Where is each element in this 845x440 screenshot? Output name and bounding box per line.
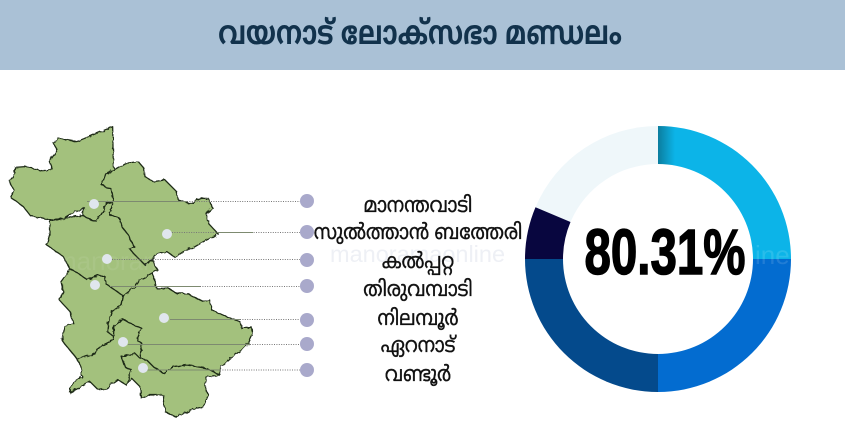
region: Mananthavady: [9, 127, 115, 222]
watermark: manoramaonline: [330, 241, 505, 267]
map: seven assembly constituencies: [9, 127, 252, 417]
constituency labels: [314, 193, 522, 386]
constituency labels: കൽപ്പറ്റ: [382, 250, 454, 275]
segment: bottom left: [525, 259, 658, 392]
region: Sulthan Bathery: [102, 162, 218, 265]
constituency labels: സുൽത്താൻ ബത്തേരി: [314, 220, 522, 244]
constituency labels: വണ്ടൂർ: [385, 363, 451, 386]
segment: navy: [525, 207, 570, 259]
watermark on ring: ine: [755, 240, 790, 270]
region: Eranad: [70, 318, 142, 393]
map watermark: manorama: [55, 246, 180, 276]
region: Kalpetta: [47, 202, 157, 296]
constituency labels: തിരുവമ്പാടി: [363, 277, 473, 301]
header band: [0, 0, 845, 70]
leader lines: [87, 202, 300, 370]
region: Thiruvambady: [59, 269, 123, 359]
constituency labels: മാനന്തവാടി: [364, 193, 472, 217]
title: വയനാട് ലോക്സഭാ മണ്ഡലം: [218, 15, 622, 52]
donut chart: [525, 126, 791, 392]
segment: bottom right: [658, 259, 791, 392]
legend bullets: [300, 194, 314, 377]
percentage: 80.31%: [584, 216, 746, 288]
segment: top right: [658, 126, 791, 259]
map location dots: [89, 199, 172, 373]
segment: light remainder: [536, 126, 658, 222]
constituency labels: നിലമ്പൂർ: [378, 306, 459, 330]
region: Wandoor: [122, 353, 220, 417]
region: Nilambur: [107, 273, 252, 375]
constituency labels: ഏറനാട്: [381, 334, 457, 357]
